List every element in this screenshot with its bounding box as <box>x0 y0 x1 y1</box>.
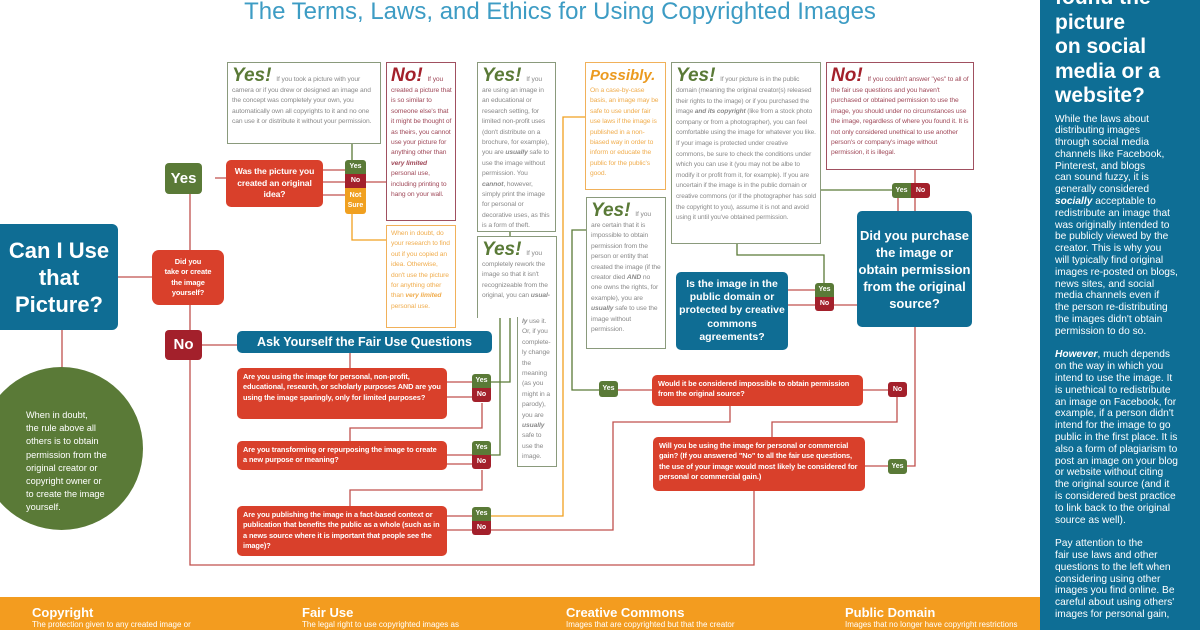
footer glossary <box>0 597 1040 630</box>
side body text: redistribute an image that <box>1055 208 1170 219</box>
answer: when in doubt research <box>386 225 456 328</box>
side heading: website? <box>1055 84 1145 107</box>
fair use question 3: Are you publishing the image in a fact-based context or publication that benefits the public as a whole (such as in a news source where it is important that people see the image)? <box>243 510 440 550</box>
answer: yes rework <box>477 236 557 318</box>
callout circle: when in doubt <box>0 367 143 530</box>
callout circle: when in doubt: others is to obtain <box>26 436 99 446</box>
start box: Can I Use that Picture: that <box>39 264 79 290</box>
callout circle: when in doubt: permission from the <box>26 450 107 460</box>
heading: fair use questions: Ask Yourself the Fair Use Questions <box>257 335 472 349</box>
yes/no q3: Yes <box>475 510 488 517</box>
answer: possibly <box>585 62 666 190</box>
question: impossible to obtain <box>652 375 863 406</box>
side heading <box>1054 0 1160 107</box>
question: was the picture original: Was the picture you created an original idea? <box>235 166 314 199</box>
callout circle: when in doubt: original creator or <box>26 463 98 473</box>
answer: yes own picture: Yes! If you took a picture with your camera or if you drew or designed an image and the concept was completely your own, you automatically own all copyrights to it and no one can use it or distribute it without your permission. <box>232 65 371 125</box>
side body text: on the way in which you <box>1055 361 1163 372</box>
heading: fair use questions <box>237 331 492 353</box>
yes/no public domain: No <box>820 300 829 307</box>
answer: yes rework: Yes! If you completely rework the image so that it isn't recognizeable from the original, you can usual- <box>482 239 550 299</box>
label yes <box>165 163 202 194</box>
yes/no q3 <box>472 507 491 535</box>
yes/no public domain: Yes <box>818 286 831 293</box>
side body text: through social media <box>1055 137 1149 148</box>
side body text: Pinterest, and blogs <box>1055 161 1145 172</box>
answer: possibly: Possibly. <box>590 67 655 84</box>
question: personal or commercial gain: Will you be using the image for personal or commercial gain? (If you answered "No" to all the fair use questions, the use of your image would most likely be considered for personal or commercial gain.) <box>659 441 857 481</box>
answer: rework narrow continuation <box>517 317 557 467</box>
side body text: an image on Facebook, for <box>1055 397 1176 408</box>
yes/no q1: Yes <box>475 377 488 384</box>
term: copyright: Copyright <box>32 605 93 620</box>
term: creative commons: Creative Commons <box>566 605 684 620</box>
side body text: can sound fuzzy, it is <box>1055 172 1149 183</box>
side body text: intend for the image to go <box>1055 420 1171 431</box>
yes/no q3: No <box>477 524 486 531</box>
side heading: media or a <box>1055 60 1160 82</box>
yes/no q2: Yes <box>475 444 488 451</box>
label no: No <box>893 386 902 393</box>
yes/no/not sure stack <box>345 160 366 214</box>
term: public domain <box>845 605 1018 629</box>
yes/no/not sure stack: No <box>351 177 360 184</box>
answer: possibly: On a case-by-case basis, an image may be safe to use under fair use laws if the image is published in a non-biased way in order to inform or educate the public for the public's good. <box>590 87 658 177</box>
side body text: is unethical to redistribute <box>1055 385 1171 396</box>
label yes: Yes <box>602 385 615 392</box>
label yes: Yes <box>171 170 196 187</box>
start box: Can I Use that Picture: Can I Use <box>9 238 109 262</box>
fair use question 1: Are you using the image for personal, non-profit, educational, research, or scholarly purposes AND are you using the image sparingly, only for limited purposes? <box>243 372 441 402</box>
yes/no purchase: Yes <box>895 187 908 194</box>
yes/no/not sure stack: Not Sure <box>348 192 363 209</box>
term: creative commons <box>566 605 735 629</box>
side body text: media channels even if <box>1055 290 1159 301</box>
side body text: images you find online. Be <box>1055 585 1174 596</box>
side body text: example, if a person didn't <box>1055 408 1174 419</box>
side body text: or website without citing <box>1055 467 1163 478</box>
question: purchase <box>857 211 972 327</box>
answer: no similar: No! If you created a picture that is so similar to someone else's that it might be thought of as theirs, you cannot use your picture for anything other than very limited personal use, including printing to hang on your wall. <box>391 65 452 198</box>
question: purchase: Did you purchase the image or obtain permission from the original source? <box>859 228 970 310</box>
side body text: the person re-distributing <box>1055 302 1168 313</box>
term: creative commons: Images that are copyrighted but that the creator <box>566 620 735 629</box>
question: did you take or create <box>152 250 224 305</box>
side heading: picture <box>1055 10 1125 34</box>
question: impossible to obtain: Would it be considered impossible to obtain permission from the original source? <box>658 379 849 398</box>
side body text: source as well). <box>1055 515 1126 526</box>
side body text: the original source (and it <box>1055 479 1169 490</box>
answer: no illegal: No! If you couldn't answer "yes" to all of the fair use questions and you haven't purchased or obtained permission to use the image, you should under no circumstances use the image, regardless of where you found it. It is not only considered unethical to use another person's or company's image without permission, it is illegal. <box>831 65 969 156</box>
side body text: intend to use the image. It <box>1055 373 1172 384</box>
label no <box>165 330 202 360</box>
label no <box>888 382 907 397</box>
fair use question 2 <box>237 441 447 470</box>
term: fair use <box>302 605 459 629</box>
side body text: also a form of plagiarism to <box>1055 444 1177 455</box>
side body text: considering using other <box>1055 574 1160 585</box>
label no: No <box>174 336 194 353</box>
term: copyright <box>32 605 191 629</box>
side body text: generally considered <box>1055 184 1149 195</box>
question: did you take or create: Did you <box>175 257 201 266</box>
side heading: on social <box>1055 35 1146 58</box>
side body text: permission to do so. <box>1055 326 1146 337</box>
answer: yes educational: Yes! If you are using an image in an educational or research setting, for limited non-profit uses (don't distribute on a brochure, for example), you are usually safe to use the image without permission. You cannot, however, simply print the image for personal or decorative uses, as this is a form of theft. <box>482 65 549 229</box>
question: was the picture original <box>226 160 323 207</box>
yes/no purchase: No <box>916 187 925 194</box>
callout circle: when in doubt: to create the image <box>26 489 105 499</box>
side body text: creator. This is why you <box>1055 243 1161 254</box>
fair use question 1 <box>237 368 447 419</box>
side body text: to link back to the original <box>1055 503 1170 514</box>
term: fair use: The legal right to use copyrighted images as <box>302 620 459 629</box>
label yes <box>888 459 907 474</box>
side body text: be publicly viewed by the <box>1055 231 1168 242</box>
callout circle: when in doubt: the rule above all <box>26 423 96 433</box>
yes/no q1: No <box>477 391 486 398</box>
side body text: images re-posted on blogs, <box>1055 267 1178 278</box>
side body text <box>1055 114 1178 620</box>
side body text: will typically find original <box>1055 255 1163 266</box>
yes/no q2 <box>472 441 491 469</box>
term: public domain: Images that no longer have copyright restrictions <box>845 620 1018 629</box>
side body text: channels like Facebook, <box>1055 149 1164 160</box>
yes/no q2: No <box>477 458 486 465</box>
side body text: public in the first place. It is <box>1055 432 1177 443</box>
callout circle: when in doubt: copyright owner or <box>26 476 102 486</box>
label yes: Yes <box>891 463 904 470</box>
callout circle: when in doubt: When in doubt, <box>26 410 88 420</box>
side panel: social media <box>1040 0 1200 630</box>
question: public domain: Is the image in the public domain or protected by creative commons agreements? <box>679 278 785 343</box>
side body text: Pay attention to the <box>1055 538 1143 549</box>
side body text: news sites, and social <box>1055 279 1154 290</box>
side body text: socially acceptable to <box>1055 196 1156 207</box>
term: fair use: Fair Use <box>302 605 353 620</box>
question: personal or commercial gain <box>653 437 865 491</box>
answer: yes public domain: Yes! If your picture is in the public domain (meaning the original creator(s) released their rights to the image) or if you purchased the image and its copyright (like from a stock photo company or from a photographer), you can feel comfortable using the image for whatever you like. If your image is protected under creative commons, be sure to check the conditions under which you can use it (you may not be albe to modify it or profit from it, for example). If you are uncertain if the image is in the public domain or creative commons (or if the photographer has sold the copyright to you), assume it is not and avoid using it until you've obtained permission. <box>676 65 816 221</box>
yes/no q1 <box>472 374 491 402</box>
side body text: the images didn't obtain <box>1055 314 1162 325</box>
answer: yes own picture <box>227 62 381 144</box>
side body text: images for personal gain, <box>1055 609 1169 620</box>
side body text: However, much depends <box>1055 349 1170 360</box>
start box: Can I Use that Picture <box>0 224 118 330</box>
answer: when in doubt research: When in doubt, do your research to find out if you copied an idea. Otherwise, don't use the picture for anything other than very limited personal use. <box>391 230 450 310</box>
start box: Can I Use that Picture: Picture? <box>15 292 103 316</box>
side body text: is considered best practice <box>1055 491 1176 502</box>
side body text: distributing images <box>1055 125 1140 136</box>
callout circle: when in doubt: yourself. <box>26 502 61 512</box>
side body text: fair use laws and other <box>1055 550 1158 561</box>
side body text: careful about using others' <box>1055 597 1174 608</box>
answer: yes impossible to obtain: Yes! If you are certain that it is impossible to obtain permission from the person or entity that created the image (if the creator died AND no one owns the rights, for example), you are usually safe to use the image without permission. <box>591 200 661 333</box>
term: public domain: Public Domain <box>845 605 935 620</box>
question: did you take or create: the image <box>171 278 205 287</box>
question: did you take or create: yourself? <box>172 288 204 297</box>
yes/no purchase <box>892 183 930 198</box>
yes/no/not sure stack: Yes <box>349 163 362 170</box>
side body text: post an image on your blog <box>1055 456 1178 467</box>
label yes <box>599 381 618 397</box>
side body text: While the laws about <box>1055 114 1149 124</box>
question: did you take or create: take or create <box>165 267 211 276</box>
side body text: was originally intended to <box>1055 220 1169 231</box>
side body text: questions to the left when <box>1055 562 1171 573</box>
yes/no public domain <box>815 283 834 311</box>
term: copyright: The protection given to any created image or <box>32 620 191 629</box>
answer: rework narrow continuation: ly use it. Or, if you complete-ly change the meaning (as you might in a parody), you are usually safe to use the image. <box>522 318 550 460</box>
fair use question 2: Are you transforming or repurposing the image to create a new purpose or meaning? <box>243 445 437 464</box>
